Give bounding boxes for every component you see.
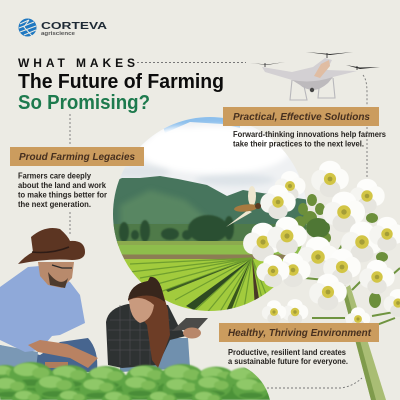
shirt xyxy=(0,266,85,352)
logo xyxy=(18,18,108,37)
hair xyxy=(128,277,170,368)
text block xyxy=(18,172,107,209)
heading label: Proud Farming Legacies xyxy=(19,151,135,163)
photo: farmer woman xyxy=(106,277,208,372)
text block xyxy=(228,348,348,366)
photo: farmer man xyxy=(0,228,98,372)
text block: about the land and work xyxy=(18,181,107,190)
neck and face xyxy=(38,262,74,288)
crop field xyxy=(124,257,284,311)
title: So Promising? xyxy=(18,91,150,114)
panel: healthy environment xyxy=(219,323,379,366)
text block: take their practices to the next level. xyxy=(233,140,364,148)
far field strip xyxy=(110,245,310,255)
icon: flower cluster xyxy=(243,161,400,331)
icon: corteva mark xyxy=(18,18,36,36)
jeans xyxy=(0,338,97,372)
icon: drone xyxy=(250,52,380,100)
title: The Future of Farming xyxy=(18,70,224,93)
hand xyxy=(183,328,201,338)
flower stem xyxy=(305,235,400,400)
panel: practical solutions xyxy=(223,107,387,148)
panel: farming legacies xyxy=(10,147,144,209)
text block: the next generation. xyxy=(18,200,91,209)
heading label xyxy=(223,107,379,126)
text block: to make things better for xyxy=(18,190,107,200)
text block xyxy=(233,130,387,148)
plaid shirt xyxy=(106,304,186,368)
heading label: Healthy, Thriving Environment xyxy=(228,327,371,339)
title: WHAT MAKES xyxy=(18,56,135,70)
text block: Farmers care deeply xyxy=(18,172,92,180)
forearm and hand xyxy=(28,340,98,368)
hat xyxy=(18,228,85,264)
title xyxy=(18,56,224,114)
text block: Productive, resilient land creates xyxy=(228,348,347,357)
dashed connectors xyxy=(70,62,367,388)
heading label xyxy=(219,323,379,342)
wordmark: CORTEVA xyxy=(41,20,108,32)
heading label: Practical, Effective Solutions xyxy=(233,111,370,123)
circular landscape photo xyxy=(110,115,310,315)
face xyxy=(129,298,154,323)
glasses xyxy=(52,265,72,268)
jeans xyxy=(120,338,190,372)
text block: Forward-thinking innovations help farmers xyxy=(233,130,387,139)
text block: a sustainable future for everyone. xyxy=(228,357,348,366)
sub-brand: agriscience xyxy=(41,31,75,37)
lettuce row xyxy=(0,362,280,400)
icon: bee xyxy=(226,186,261,227)
tablet xyxy=(172,318,208,331)
